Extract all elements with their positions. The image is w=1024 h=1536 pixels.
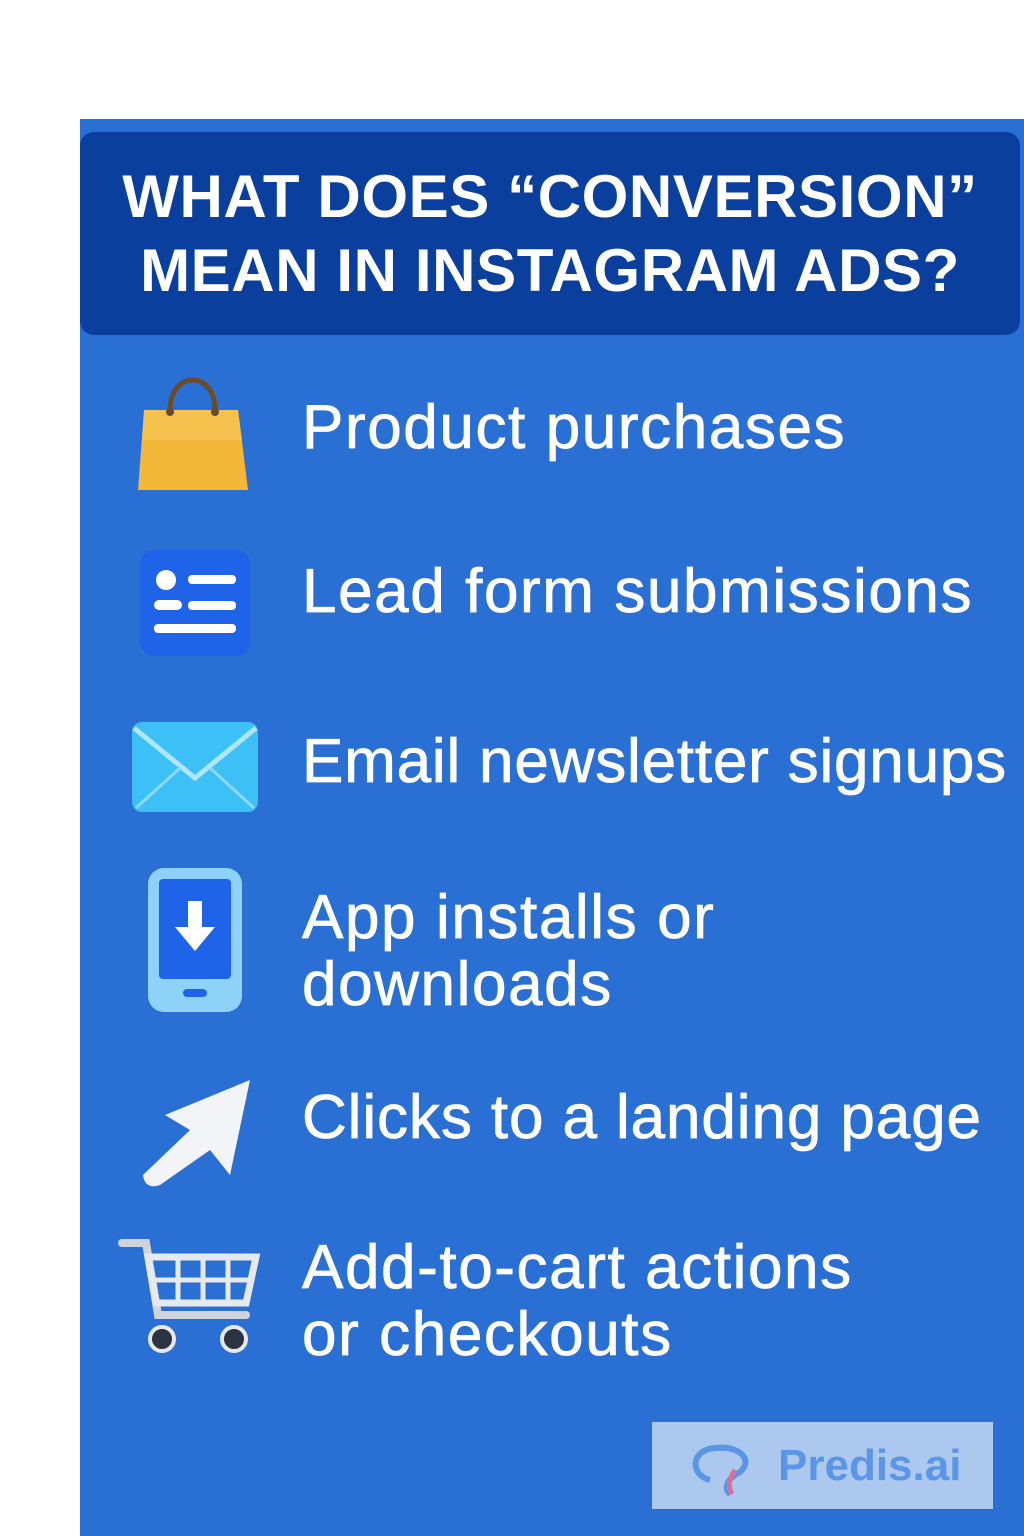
item text: app installs [302,883,715,1019]
icon: arrow [143,1080,250,1186]
icon: logo swirl [692,1444,748,1496]
item text: add-to-cart: Add-to-cart actions [302,1233,853,1302]
item text: add-to-cart: or checkouts [302,1300,673,1369]
icon: email envelope [132,722,258,812]
icon: phone download [148,868,242,1012]
title box [80,132,1020,335]
title box: WHAT DOES “CONVERSION” [122,163,978,230]
watermark logo [652,1422,993,1509]
icon: shopping bag [138,378,248,490]
item text: app installs: downloads [302,950,613,1019]
item text: product purchases: Product purchases [302,393,846,462]
item text: app installs: App installs or [302,883,715,952]
item text: email newsletter signups: Email newsletter signups [302,727,1007,796]
icon: shopping cart [118,1239,260,1353]
item text: lead form submissions: Lead form submissions [302,557,973,626]
title box: MEAN IN INSTAGRAM ADS? [140,237,960,304]
logo text: Predis.ai [778,1441,961,1490]
item text: clicks to landing page: Clicks to a landing page [302,1083,982,1152]
icon: lead form [140,550,250,656]
item text: add-to-cart [302,1233,853,1369]
